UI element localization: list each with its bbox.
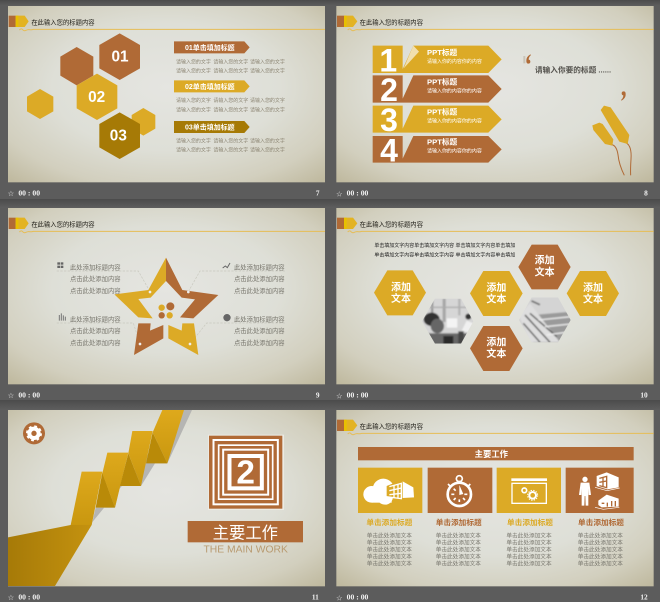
- arrow 4: [373, 132, 502, 168]
- item 01: 请输入您的文字: [176, 68, 211, 75]
- item 02: 请输入您的文字: [213, 97, 248, 104]
- intro text: 单击填加文字内容单击填加文字内容 单击填加文字内容单击填加: [374, 242, 515, 249]
- label: bottom left: 点击此处添加内容: [70, 326, 121, 335]
- hexagon: top: [518, 245, 571, 289]
- arrow 2: 请输入你的内容你的内容: [427, 88, 482, 95]
- hexagon cluster: [27, 33, 155, 159]
- card 3: window gears: 单击此处添加文本: [506, 559, 552, 567]
- footer 9: 00 : 00: [18, 391, 40, 400]
- hexagon: left: 添加: [391, 280, 411, 293]
- item 03: 请输入您的文字: [176, 137, 211, 144]
- item 01: 请输入您的文字: [213, 68, 248, 75]
- item 03: 请输入您的文字: [176, 147, 211, 154]
- icon: person: [579, 477, 591, 506]
- item 01: [174, 41, 285, 75]
- panel: slide 11 section divider: [8, 410, 325, 602]
- photo: sailing: [517, 297, 572, 343]
- item 02: 请输入您的文字: [176, 97, 211, 104]
- footer 11: 00 : 00: [18, 593, 40, 602]
- item 02: 02单击填加标题: [185, 82, 235, 91]
- slide header: [9, 16, 325, 31]
- item 02: 请输入您的文字: [250, 97, 285, 104]
- card 1: cloud: [358, 468, 422, 567]
- label: top right: 点击此处添加内容: [234, 274, 285, 283]
- hexagon: left: 文本: [391, 292, 411, 305]
- hexagon: top: 文本: [535, 265, 555, 278]
- arrow 3: [373, 102, 502, 138]
- footer 7: [8, 188, 320, 198]
- hexagon: right: [567, 271, 619, 316]
- panel: slide 7 hexagons: [8, 6, 325, 198]
- numbered square: 2: [236, 455, 255, 492]
- card 2: stopwatch: 单击添加标题: [436, 517, 482, 527]
- icon: cloud and building: [363, 479, 415, 505]
- footer 9: ☆: [8, 391, 15, 400]
- footer 9: [8, 390, 320, 400]
- intro text: [374, 242, 515, 258]
- folded ribbon: [8, 410, 192, 586]
- arrow 2: PPT标题: [427, 76, 458, 86]
- label: bottom right: [223, 314, 285, 347]
- intro text: 单击填加文字内容单击填加文字内容 单击填加文字内容单击填加: [374, 251, 515, 258]
- footer 11: 11: [312, 592, 319, 601]
- banner: [358, 447, 634, 460]
- label: top left: 此处添加标题内容: [70, 262, 121, 271]
- item 01: 请输入您的文字: [176, 58, 211, 65]
- hexagon: right: 文本: [583, 293, 603, 306]
- banner: 主要工作: [475, 449, 509, 459]
- label: top right: 点击此处添加内容: [234, 286, 285, 295]
- card 3: window gears: 单击此处添加文本: [506, 538, 552, 546]
- item 02: 请输入您的文字: [250, 106, 285, 113]
- footer 11: ☆: [8, 593, 15, 602]
- card 2: stopwatch: 单击此处添加文本: [436, 532, 481, 540]
- item 01: 请输入您的文字: [213, 58, 248, 65]
- item 01: 请输入您的文字: [250, 68, 285, 75]
- hexagon cluster: 03: [110, 127, 127, 144]
- label: bottom left: [59, 313, 121, 347]
- slide header: 在此输入您的标题内容: [31, 17, 95, 26]
- section title: THE MAIN WORK: [203, 545, 288, 556]
- item 02: [174, 80, 285, 113]
- arrow 1: [373, 42, 502, 78]
- slide header: 在此输入您的标题内容: [360, 219, 424, 228]
- footer 10: 00 : 00: [347, 391, 369, 400]
- item 03: 请输入您的文字: [250, 137, 285, 144]
- footer 8: 00 : 00: [347, 189, 369, 198]
- quote: [523, 54, 626, 101]
- card 2: stopwatch: 单击此处添加文本: [436, 559, 481, 567]
- item 03: 请输入您的文字: [250, 147, 285, 154]
- footer 7: ☆: [8, 189, 15, 198]
- card 4: person and buildings: 单击此处添加文本: [578, 545, 623, 553]
- photo: meeting: [422, 298, 473, 344]
- arrow 2: [373, 72, 502, 108]
- slide header: 在此输入您的标题内容: [31, 219, 95, 228]
- footer 8: ☆: [336, 190, 343, 199]
- icon: wheat: [592, 106, 631, 175]
- panel: slide 8 arrows: [336, 6, 654, 199]
- panel: slide 10 hexagon text and photos: [336, 208, 654, 401]
- card 4: person and buildings: 单击此处添加文本: [578, 552, 623, 560]
- hexagon: bottom: [470, 326, 523, 371]
- arrow 1: PPT标题: [427, 47, 458, 57]
- hexagon: center: 添加: [486, 281, 506, 294]
- item 03: 03单击填加标题: [185, 123, 235, 132]
- icon: stopwatch: [448, 476, 471, 506]
- section title: [188, 521, 303, 556]
- hexagon: bottom: 文本: [486, 347, 506, 360]
- arrow 1: 1: [379, 42, 397, 78]
- star: [114, 258, 218, 355]
- item 03: 请输入您的文字: [213, 137, 248, 144]
- arrow 3: 3: [380, 102, 398, 138]
- footer 8: 8: [644, 188, 648, 197]
- card 2: stopwatch: 单击此处添加文本: [436, 538, 481, 546]
- label: top left: [57, 262, 121, 295]
- card 4: person and buildings: 单击此处添加文本: [578, 559, 623, 567]
- footer 7: 7: [316, 188, 320, 197]
- label: bottom left: 点击此处添加内容: [70, 338, 121, 347]
- card 1: cloud: 单击此处添加文本: [367, 545, 412, 553]
- numbered square: [208, 435, 284, 510]
- card 1: cloud: 单击此处添加文本: [367, 538, 412, 546]
- arrow 2: 2: [380, 72, 398, 108]
- card 2: stopwatch: 单击此处添加文本: [436, 545, 481, 553]
- panel: slide 12 main work: [336, 410, 654, 602]
- slide header: [337, 420, 654, 435]
- icon: office building: [595, 472, 620, 491]
- footer 10: 10: [640, 390, 648, 399]
- slide header: [9, 218, 325, 233]
- footer 9: 9: [316, 390, 320, 399]
- card 3: window gears: 单击此处添加文本: [506, 545, 552, 553]
- label: bottom right: 此处添加标题内容: [234, 314, 285, 323]
- card 1: cloud: 单击添加标题: [366, 517, 413, 527]
- item 03: 请输入您的文字: [213, 147, 248, 154]
- hexagon: left: [374, 270, 426, 315]
- card 1: cloud: 单击此处添加文本: [367, 552, 412, 560]
- icon: house: [595, 495, 619, 509]
- arrow 4: 4: [380, 132, 398, 168]
- arrow 3: PPT标题: [427, 106, 458, 116]
- arrow 1: 请输入你的内容你的内容: [427, 58, 482, 65]
- footer 7: 00 : 00: [18, 189, 40, 198]
- card 3: window gears: 单击此处添加文本: [506, 552, 552, 560]
- card 4: person and buildings: 单击添加标题: [578, 517, 624, 527]
- label: top left: 点击此处添加内容: [70, 286, 121, 295]
- footer 12: [336, 592, 648, 602]
- card 4: person and buildings: 单击此处添加文本: [578, 532, 623, 540]
- hexagon: center: [470, 271, 523, 316]
- slide header: [337, 16, 654, 31]
- item 01: 01单击填加标题: [185, 43, 235, 52]
- icon: gear: [23, 422, 45, 444]
- footer 10: [336, 390, 648, 401]
- hexagon cluster: 01: [111, 49, 129, 66]
- arrow 4: PPT标题: [427, 136, 458, 146]
- panel: slide 9 star: [8, 208, 325, 400]
- card 1: cloud: 单击此处添加文本: [367, 559, 412, 567]
- label: bottom left: 此处添加标题内容: [70, 314, 121, 323]
- leader lines: [57, 271, 285, 344]
- footer 11: [8, 592, 319, 602]
- card 2: stopwatch: [428, 468, 492, 567]
- hexagon: center: 文本: [486, 293, 506, 306]
- label: top left: 点击此处添加内容: [70, 274, 121, 283]
- item 02: 请输入您的文字: [213, 106, 248, 113]
- footer 12: 00 : 00: [347, 593, 369, 602]
- item 02: 请输入您的文字: [176, 106, 211, 113]
- card 1: cloud: 单击此处添加文本: [367, 532, 412, 540]
- card 3: window gears: 单击此处添加文本: [506, 532, 552, 540]
- arrow 4: 请输入你的内容你的内容: [427, 148, 482, 155]
- label: bottom right: 点击此处添加内容: [234, 326, 285, 335]
- hexagon: right: 添加: [583, 281, 603, 294]
- arrow 3: 请输入你的内容你的内容: [427, 118, 482, 125]
- hexagon cluster: 02: [88, 89, 105, 106]
- footer 12: 12: [640, 592, 648, 601]
- label: top right: 此处添加标题内容: [234, 262, 285, 271]
- card 4: person and buildings: 单击此处添加文本: [578, 538, 623, 546]
- slide header: 在此输入您的标题内容: [360, 17, 424, 26]
- card 2: stopwatch: 单击此处添加文本: [436, 552, 481, 560]
- card 4: person and buildings: [566, 468, 634, 567]
- item 03: [174, 121, 285, 154]
- hexagon: top: 添加: [535, 254, 555, 267]
- quote: 请输入你要的标题 ......: [535, 65, 611, 75]
- footer 10: ☆: [336, 392, 343, 401]
- card 3: window gears: [497, 468, 561, 567]
- card 3: window gears: 单击添加标题: [507, 517, 553, 527]
- slide header: 在此输入您的标题内容: [360, 421, 424, 430]
- label: bottom right: 点击此处添加内容: [234, 338, 285, 347]
- section title: 主要工作: [213, 524, 278, 542]
- item 01: 请输入您的文字: [250, 58, 285, 65]
- label: top right: [223, 262, 285, 295]
- icon: window with gears: [511, 478, 547, 503]
- slide header: [337, 218, 654, 233]
- hexagon: bottom: 添加: [486, 335, 506, 348]
- footer 8: [336, 188, 648, 199]
